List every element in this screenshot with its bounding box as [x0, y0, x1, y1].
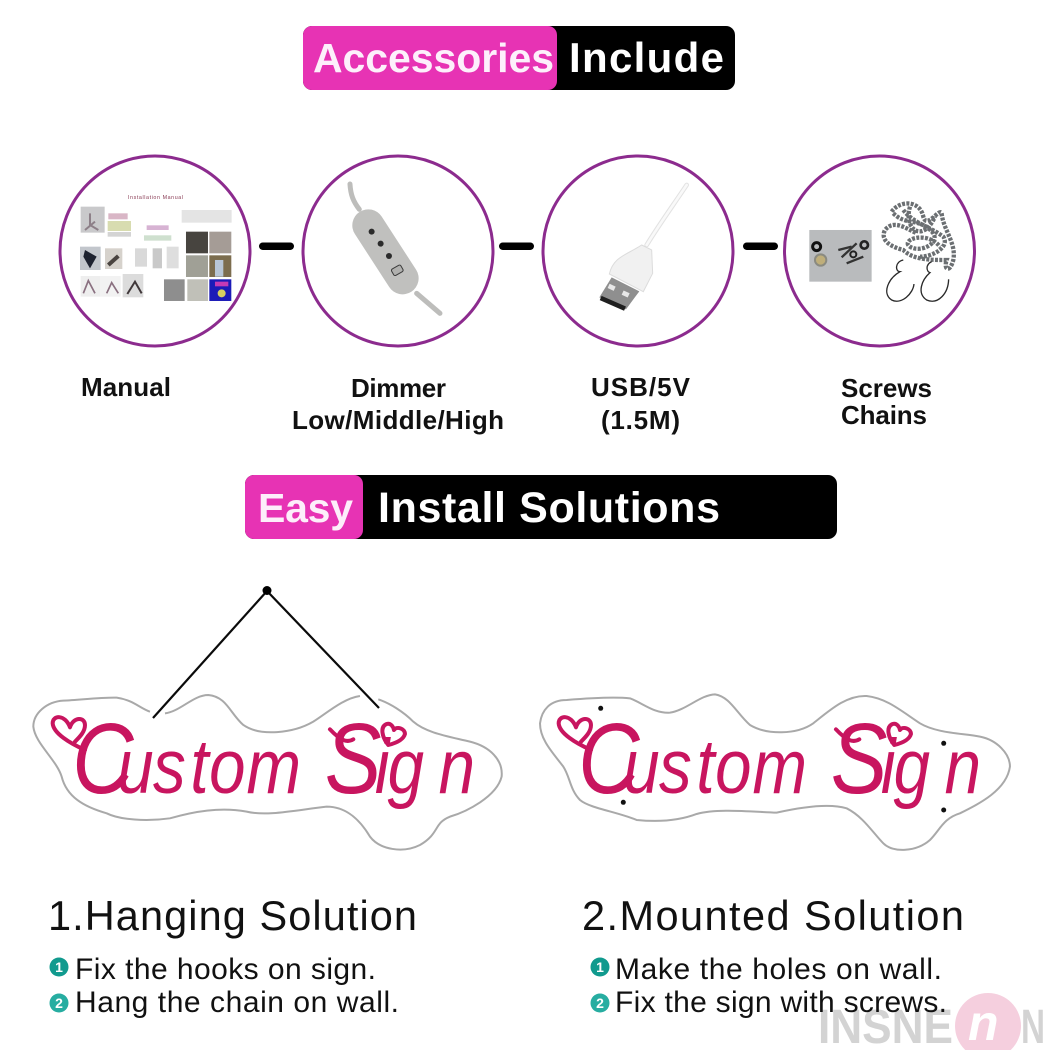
hanging wire and pin — [153, 586, 379, 718]
label: Screws Chains: Screws — [841, 373, 932, 403]
steps: mounted: Make the holes on wall. — [615, 953, 942, 986]
panel: manual accessory: Installation Manual — [128, 195, 183, 201]
connector dash 3 — [743, 242, 778, 250]
label: USB/5V (1.5M) — [591, 372, 691, 435]
label: USB/5V (1.5M): (1.5M) — [601, 405, 680, 435]
neon hearts — [53, 717, 405, 750]
badge 2: 2 — [55, 995, 63, 1011]
neon hearts — [559, 717, 911, 750]
heading: Easy Install Solutions: Easy — [258, 485, 353, 531]
badge 1 — [50, 958, 68, 976]
mounting holes — [598, 706, 946, 812]
connector dash 1 — [259, 242, 294, 250]
heading: Easy Install Solutions — [245, 475, 837, 539]
panel: dimmer accessory — [303, 156, 493, 346]
badge 2 — [590, 994, 610, 1012]
heading: 2.Mounted Solution: 2.Mounted Solution — [582, 892, 964, 939]
steps: hanging: Hang the chain on wall. — [75, 986, 399, 1019]
steps: hanging: Fix the hooks on sign. — [75, 953, 376, 986]
label: Screws Chains — [841, 373, 932, 430]
label: Screws Chains: Chains — [841, 400, 927, 430]
badge 2: 2 — [596, 995, 604, 1011]
sign outline — [33, 695, 502, 850]
label: Manual: Manual — [81, 372, 171, 402]
connector dash 2 — [499, 242, 534, 250]
watermark: INSNEON logo: n — [968, 995, 999, 1050]
steps: mounted: Fix the sign with screws. — [615, 986, 947, 1019]
label: Dimmer Low/Middle/High — [292, 373, 504, 435]
panel: screws and chains accessory — [784, 156, 974, 346]
neon lettering: Custom Sign — [72, 702, 475, 815]
heading: Accessories Include: Include — [569, 34, 724, 81]
panel: USB accessory — [543, 156, 733, 346]
heading: Accessories Include — [303, 26, 735, 90]
heading: Easy Install Solutions: Install Solutions — [378, 484, 720, 532]
panel: manual accessory — [60, 156, 250, 346]
badge 1: 1 — [596, 959, 604, 975]
label: Dimmer Low/Middle/High: Low/Middle/High — [292, 405, 504, 435]
sign outline — [540, 694, 1010, 850]
steps: mounted — [590, 953, 947, 1019]
illustration: mounted sign — [540, 694, 1010, 850]
heading: 1.Hanging Solution: 1.Hanging Solution — [48, 892, 417, 939]
heading: Accessories Include: Accessories — [313, 35, 554, 81]
label: USB/5V (1.5M): USB/5V — [591, 372, 691, 402]
badge 1 — [590, 958, 610, 976]
badge 1: 1 — [55, 959, 63, 975]
neon lettering: Custom Sign — [578, 702, 981, 815]
illustration: hanging sign — [33, 586, 502, 850]
watermark: INSNEON logo — [818, 993, 1045, 1050]
steps: hanging — [50, 953, 399, 1019]
label: Dimmer Low/Middle/High: Dimmer — [351, 373, 446, 403]
badge 2 — [50, 994, 68, 1012]
